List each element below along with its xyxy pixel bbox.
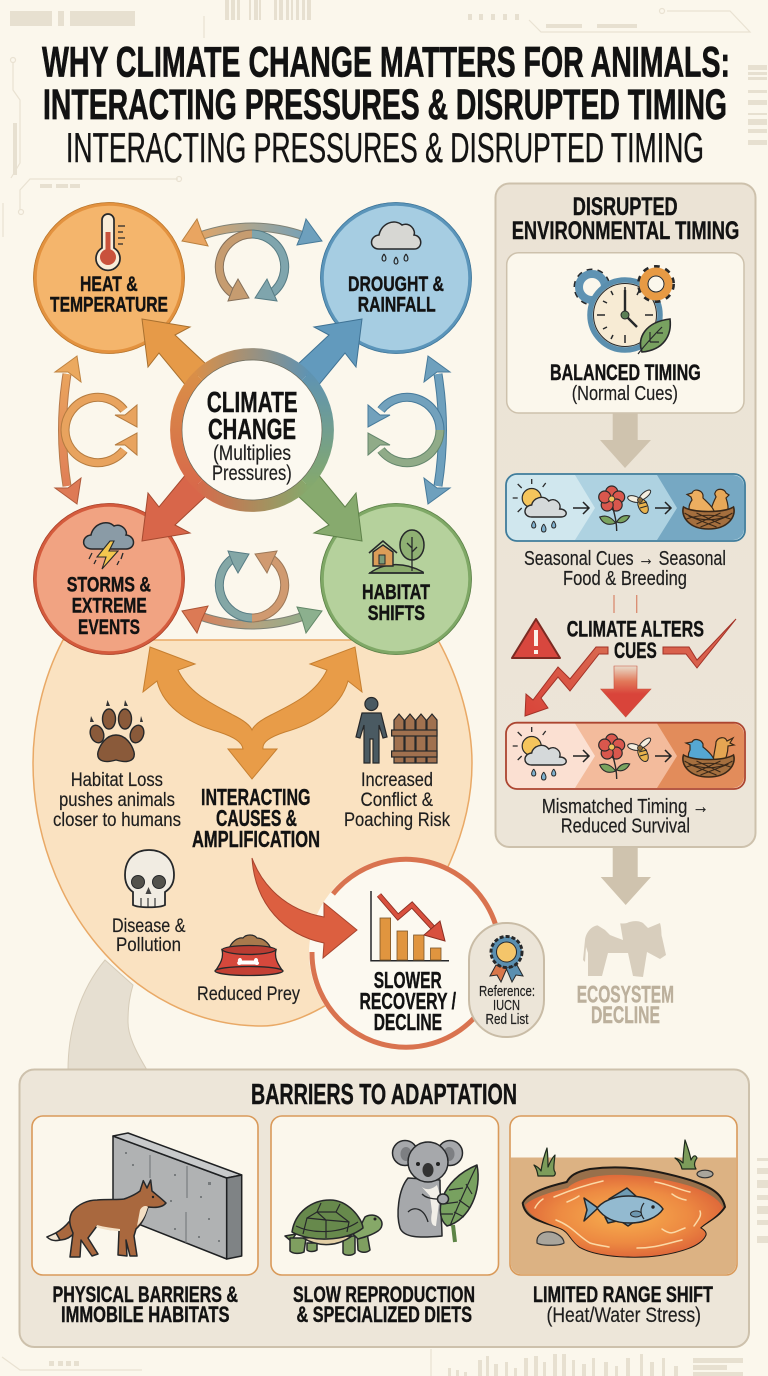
arrow: balanced to seasonal (600, 413, 651, 468)
icon: person and fence (356, 698, 437, 763)
label: drought: RAINFALL (358, 294, 436, 317)
icon: grass right (675, 1140, 697, 1169)
hub ring (176, 354, 328, 506)
icon: rocks (537, 1170, 713, 1245)
icon: wall (113, 1133, 242, 1259)
text: ecosystem decline: ECOSYSTEM (577, 982, 674, 1009)
label: drought: DROUGHT & (348, 273, 444, 296)
card: slow reproduction (271, 1116, 498, 1275)
label: slow reproduction: & SPECIALIZED DIETS (296, 1302, 472, 1327)
heading: climate alters cues: CUES (614, 638, 657, 663)
text: reduced prey: Reduced Prey (197, 983, 300, 1005)
icon: drying pond (523, 1167, 725, 1257)
label: storms (67, 574, 151, 639)
text: reference: Red List (486, 1011, 529, 1028)
label: slow reproduction (293, 1282, 475, 1327)
heading: interacting causes: CAUSES & (216, 805, 297, 831)
icon: bee (627, 488, 652, 515)
label: heat (50, 273, 168, 317)
arrow: climate to storms (142, 473, 207, 541)
icon: sun and rain cloud (513, 727, 566, 780)
label: habitat: SHIFTS (368, 602, 425, 625)
arrow: interacting causes branching (143, 647, 362, 779)
heading: climate alters cues: CLIMATE ALTERS (567, 617, 704, 642)
icon: flower (599, 486, 630, 531)
text: increased conflict: Conflict & (360, 789, 433, 811)
label: balanced timing: (Normal Cues) (572, 383, 678, 405)
arrows: heat drought top interaction (182, 219, 322, 301)
label: heat: TEMPERATURE (50, 294, 168, 317)
label: habitat (362, 581, 430, 625)
arrows: storms habitat bottom interaction (182, 551, 322, 633)
connector from bubble to barriers (68, 960, 147, 1070)
icon: mismatched nest (683, 738, 734, 777)
icon: fading animal (583, 917, 666, 977)
icon: bee (627, 736, 652, 763)
arrow: zigzag right (663, 619, 736, 668)
label: heat: HEAT & (80, 273, 138, 296)
arrow: climate to heat (142, 319, 207, 387)
icon: declining bar chart (371, 891, 449, 961)
icon: storm cloud (84, 523, 134, 569)
text: seasonal cues: Seasonal Cues → Seasonal (524, 548, 726, 570)
label: balanced timing (550, 360, 701, 405)
card: limited range shift (510, 1116, 737, 1275)
icon: skull (125, 850, 174, 907)
title (42, 38, 730, 171)
text: habitat loss: closer to humans (53, 809, 181, 831)
circle: drought and rainfall (320, 202, 472, 354)
label: drought (348, 273, 444, 317)
arrow: cue to flower (573, 750, 589, 762)
circle: heat and temperature (34, 202, 184, 354)
icon: synchronized nest (683, 489, 734, 529)
text: habitat loss: Habitat Loss (71, 769, 163, 791)
hub: climate change (176, 354, 328, 506)
text: increased conflict: Increased (361, 769, 433, 791)
hub label: (Multiplies (213, 442, 291, 465)
text: seasonal cues: Food & Breeding (563, 568, 687, 590)
text: reference: Reference: (479, 983, 535, 1000)
heading: interacting causes: AMPLIFICATION (192, 826, 320, 852)
hub label: Pressures) (212, 462, 292, 485)
circle: habitat shifts (320, 504, 472, 654)
arrows: drought habitat right interaction (368, 356, 450, 504)
card: balanced timing (507, 253, 744, 413)
badge: IUCN reference (469, 923, 544, 1037)
text: increased conflict: Poaching Risk (344, 809, 450, 831)
label: slow reproduction: SLOW REPRODUCTION (293, 1282, 475, 1307)
label: limited range shift (533, 1282, 713, 1327)
text: seasonal cues (524, 548, 726, 590)
label: storms: STORMS & (67, 574, 151, 597)
arrow: amplification to decline (252, 858, 357, 958)
text: ecosystem decline (577, 982, 674, 1029)
label: storms: EVENTS (78, 616, 140, 639)
arrow: climate to drought (297, 319, 362, 387)
strip: seasonal cues (506, 474, 745, 541)
strip: mismatched timing (506, 723, 745, 789)
icon: koala (392, 1140, 478, 1242)
heading: disrupted timing (512, 193, 739, 245)
arrow: flower to nest (655, 750, 671, 762)
icon: warning triangle (512, 619, 560, 658)
label: habitat: HABITAT (362, 581, 430, 604)
icon: clock with gears and leaf (577, 268, 672, 354)
icon: thermometer (96, 214, 125, 270)
label: slower recovery (360, 967, 456, 1035)
ground (511, 1158, 736, 1274)
label: balanced timing: BALANCED TIMING (550, 360, 701, 385)
arrow: climate to habitat (297, 473, 362, 541)
panel: barriers to adaptation (20, 1070, 749, 1347)
text: habitat loss (53, 769, 181, 831)
heading: interacting causes: INTERACTING (201, 784, 310, 810)
heading: interacting causes (192, 784, 320, 852)
hub label: CLIMATE (207, 387, 298, 419)
panel: disrupted environmental timing (496, 184, 756, 847)
text: disease and pollution (112, 915, 186, 956)
label: physical barriers: PHYSICAL BARRIERS & (52, 1282, 238, 1307)
hub label: CHANGE (208, 414, 296, 446)
label: limited range shift: (Heat/Water Stress) (546, 1304, 701, 1327)
text: mismatched timing: Reduced Survival (561, 816, 690, 838)
text: increased conflict (344, 769, 450, 831)
icon: tortoise (285, 1200, 382, 1255)
label: slower recovery: RECOVERY / (360, 988, 456, 1014)
text: disease and pollution: Disease & (112, 915, 186, 937)
panel: slower recovery (309, 857, 501, 1049)
text: disease and pollution: Pollution (116, 934, 181, 956)
label: storms: EXTREME (72, 595, 147, 618)
heading: barriers: BARRIERS TO ADAPTATION (251, 1079, 517, 1111)
panel: interacting causes bubble (33, 640, 472, 1026)
hub label (207, 387, 298, 485)
text: mismatched timing (542, 796, 709, 838)
arrow: climate to mismatch (601, 666, 651, 717)
arrow: flower to nest (655, 502, 671, 514)
arrow: timing to ecosystem decline (601, 848, 651, 905)
heading: climate alters cues (567, 617, 704, 663)
heading: disrupted timing: DISRUPTED (573, 193, 678, 221)
text: reference: IUCN (493, 997, 520, 1014)
alert lines (614, 595, 637, 613)
text: mismatched timing: Mismatched Timing → (542, 796, 709, 818)
label: slower recovery: DECLINE (374, 1009, 442, 1035)
label: slower recovery: SLOWER (374, 967, 442, 993)
icon: grass left (534, 1148, 555, 1176)
label: physical barriers (52, 1282, 238, 1327)
arrow: cue to flower (573, 502, 589, 514)
icon: sun and rain cloud (513, 479, 566, 532)
icon: house and tree (369, 530, 424, 573)
arrows: heat storms left interaction (55, 356, 137, 504)
icon: bowl (215, 935, 283, 976)
label: physical barriers: IMMOBILE HABITATS (61, 1302, 230, 1327)
icon: paw (88, 700, 146, 761)
card: physical barriers (32, 1116, 258, 1275)
icon: fox (47, 1180, 166, 1257)
icon: fish (584, 1188, 663, 1226)
icon: flower (599, 734, 630, 779)
icon: ribbon (490, 936, 523, 982)
icon: rain cloud (372, 222, 421, 264)
circle: storms and extreme events (34, 504, 184, 654)
arrow: zigzag left (525, 647, 608, 716)
text: reference (479, 983, 535, 1028)
text: ecosystem decline: DECLINE (591, 1002, 660, 1029)
text: habitat loss: pushes animals (59, 789, 175, 811)
